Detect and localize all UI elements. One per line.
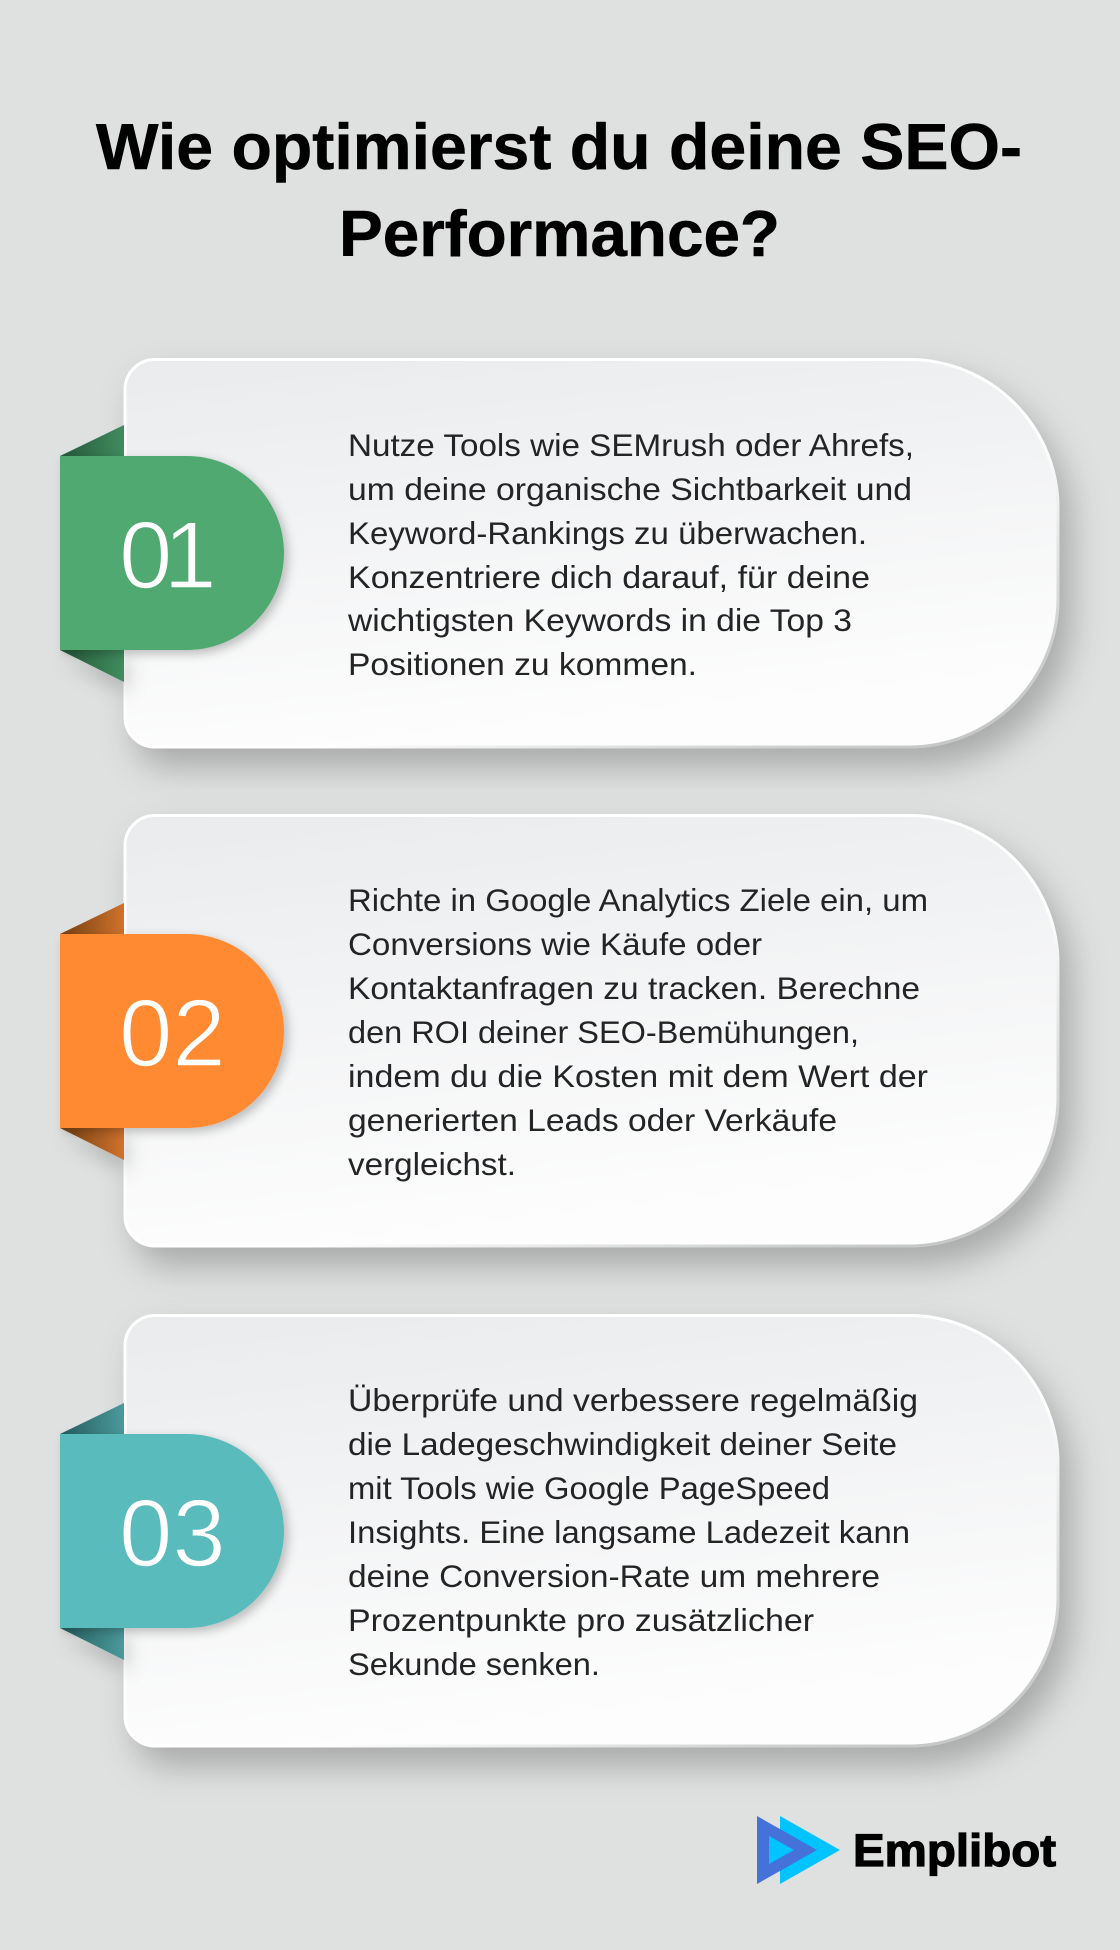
text block 1 [347,427,914,682]
text block 3: Prozentpunkte pro zusätzlicher [348,1602,814,1638]
panel: step 2 [60,816,1058,1246]
card background 3 [125,1316,1058,1746]
number badge 2 [60,934,284,1128]
text block 1: Keyword-Rankings zu überwachen. [348,515,867,551]
text block 2 [348,882,928,1182]
text block 2: vergleichst. [348,1146,516,1182]
text block 2: Richte in Google Analytics Ziele ein, um [348,882,928,918]
text block 1: Positionen zu kommen. [348,646,697,682]
text block 2: den ROI deiner SEO-Bemühungen, [348,1014,859,1050]
text block 3: Insights. Eine langsame Ladezeit kann [348,1514,910,1550]
ribbon folds 1 [60,425,124,682]
panel: step 3 [60,1316,1058,1746]
number badge 1 [60,456,284,650]
icon: play triangles [757,1816,840,1884]
text block 2: indem du die Kosten mit dem Wert der [348,1058,928,1094]
title [96,110,1022,270]
text block 2: generierten Leads oder Verkäufe [348,1102,837,1138]
card background 1 [125,360,1058,747]
logo: Emplibot [757,1816,1056,1884]
wordmark: Emplibot [853,1825,1056,1876]
text block 1: um deine organische Sichtbarkeit und [348,471,912,507]
title: Performance? [339,197,780,270]
number badge 3 [60,1434,284,1628]
ribbon folds 2 [60,903,124,1160]
text block 2: Kontaktanfragen zu tracken. Berechne [348,970,920,1006]
ribbon folds 3 [60,1403,124,1660]
number badge 1: 01 [119,502,217,609]
number badge 3: 03 [119,1480,226,1587]
text block 2: Conversions wie Käufe oder [348,926,762,962]
panel: step 1 [60,360,1058,747]
text block 1: Konzentriere dich darauf, für deine [348,559,870,595]
card background 2 [125,816,1058,1246]
text block 1: Nutze Tools wie SEMrush oder Ahrefs, [348,427,914,463]
text block 1: wichtigsten Keywords in die Top 3 [347,602,852,638]
text block 3 [348,1382,918,1682]
number badge 2: 02 [119,980,226,1087]
text block 3: deine Conversion-Rate um mehrere [348,1558,880,1594]
text block 3: Überprüfe und verbessere regelmäßig [348,1382,918,1418]
text block 3: die Ladegeschwindigkeit deiner Seite [348,1426,897,1462]
title: Wie optimierst du deine SEO- [96,110,1022,183]
text block 3: mit Tools wie Google PageSpeed [348,1470,830,1506]
text block 3: Sekunde senken. [348,1646,600,1682]
